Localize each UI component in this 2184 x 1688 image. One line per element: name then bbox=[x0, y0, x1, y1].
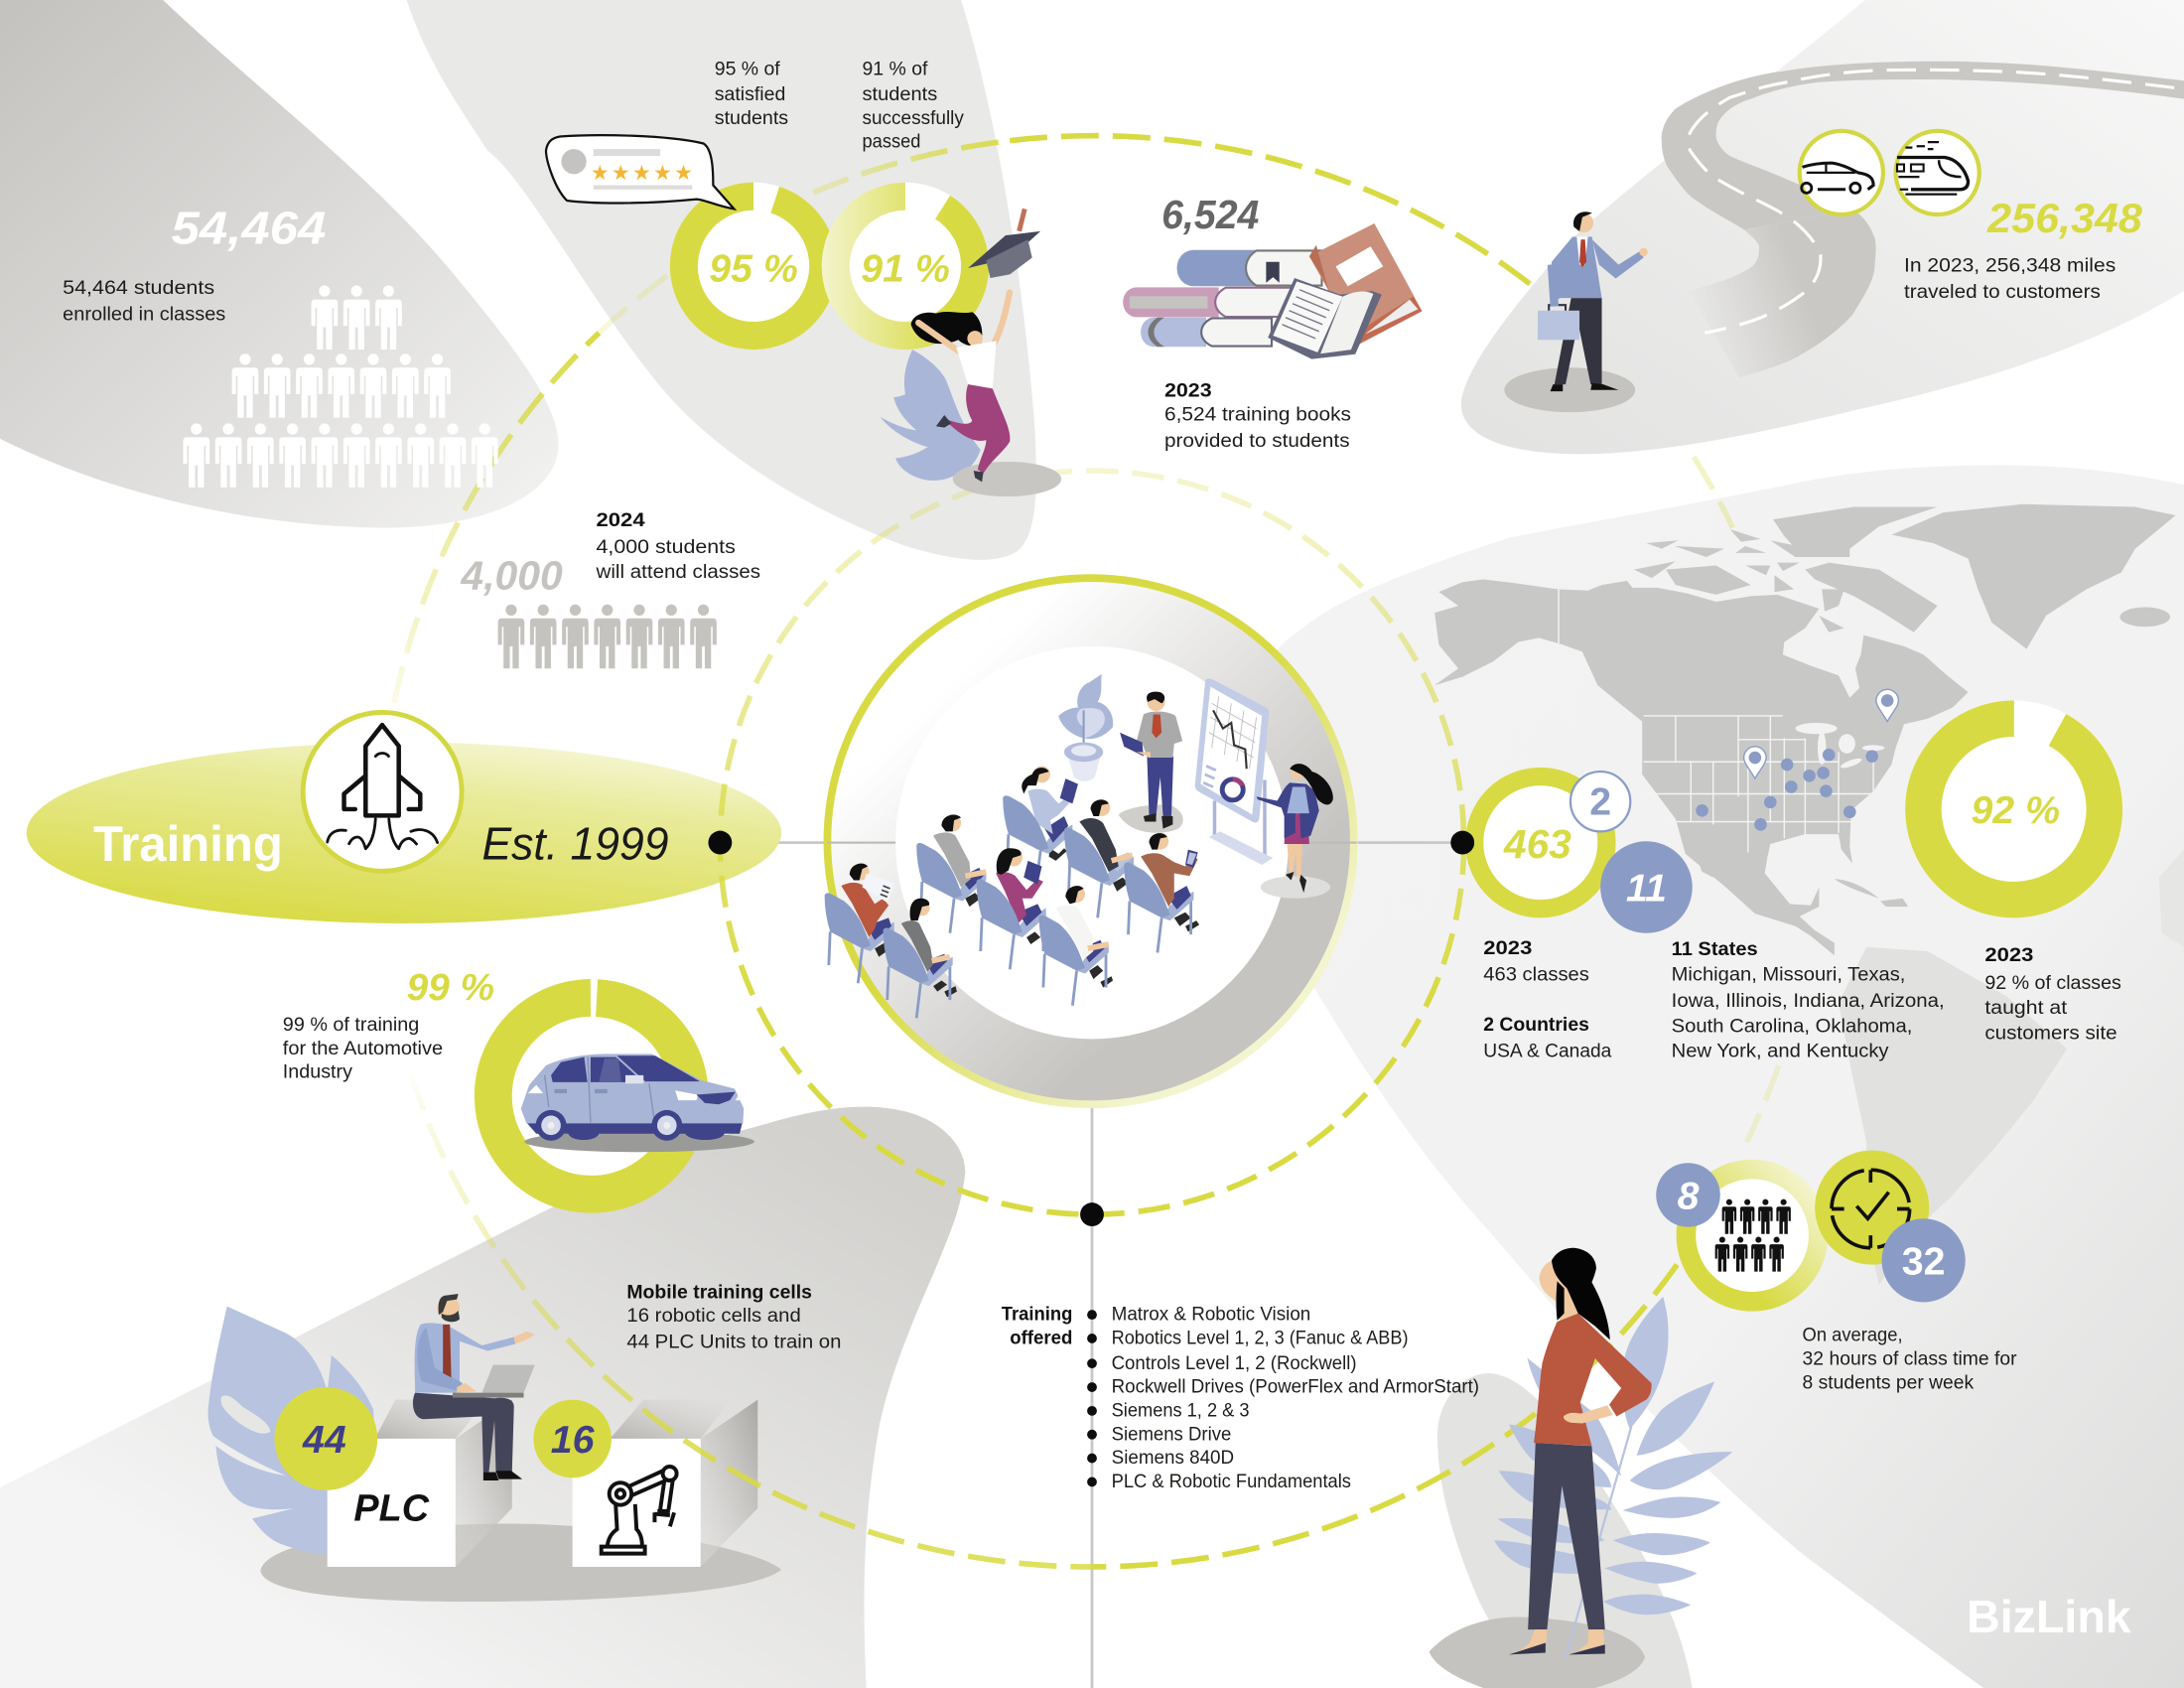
donut: 463 classes: 463 bbox=[1503, 821, 1571, 867]
text: hours of class: 8 students per week bbox=[1803, 1371, 1974, 1393]
text: students enrolled: 54,464 students bbox=[63, 277, 214, 299]
text: classes and countries: USA & Canada bbox=[1483, 1041, 1611, 1062]
text: automotive: 99 % of training bbox=[283, 1014, 419, 1036]
badge: 32 hours: 32 bbox=[1902, 1239, 1945, 1283]
list: training offered: Rockwell Drives (PowerFlex and ArmorStart) bbox=[1112, 1376, 1479, 1398]
text: mobile training cells: Mobile training cells bbox=[626, 1281, 812, 1303]
list: training offered: Controls Level 1, 2 (Rockwell) bbox=[1112, 1352, 1357, 1374]
text: training offered label: offered bbox=[1010, 1328, 1072, 1349]
text: automotive: for the Automotive bbox=[283, 1038, 443, 1059]
list: training offered: Matrox & Robotic Vision bbox=[1112, 1304, 1310, 1326]
student: blue blouse bbox=[1003, 766, 1078, 886]
badge: 44 PLC units bbox=[274, 1387, 377, 1490]
text: classes and countries: 2 Countries bbox=[1483, 1014, 1589, 1036]
stat: 99 %: 99 % bbox=[407, 967, 494, 1009]
panel: central circle bbox=[827, 578, 1354, 1104]
donut: 463 classes bbox=[1474, 776, 1606, 909]
box robot bbox=[573, 1400, 757, 1567]
icon: clock bbox=[1815, 1151, 1929, 1265]
icon: review speech bubble: ★ bbox=[674, 162, 693, 185]
text: students enrolled bbox=[63, 277, 225, 326]
text: training books bbox=[1164, 380, 1351, 452]
donut: 95 %: 95 % bbox=[709, 246, 798, 290]
text: students enrolled: enrolled in classes bbox=[63, 304, 225, 326]
map: USA state lines and lakes bbox=[1559, 589, 1884, 852]
list: training offered: Siemens 840D bbox=[1112, 1447, 1234, 1469]
illustration: jumping graduate bbox=[881, 209, 1061, 496]
text: automotive bbox=[283, 1014, 443, 1083]
background blob: map area bbox=[1227, 465, 2184, 1688]
illustration: businessman bbox=[1504, 211, 1648, 412]
text: students passed: 91 % of bbox=[862, 59, 928, 80]
icon: review speech bubble: ★ bbox=[591, 162, 610, 185]
badge: 2 countries bbox=[1570, 772, 1630, 831]
text: states: Michigan, Missouri, Texas, bbox=[1672, 963, 1905, 985]
floor shadow bbox=[260, 1523, 781, 1602]
text: students passed: students bbox=[862, 83, 937, 105]
text: satisfied students bbox=[715, 59, 788, 129]
text: states: 11 States bbox=[1672, 938, 1758, 960]
student: white shirt bbox=[1039, 886, 1113, 1006]
flip chart bbox=[1195, 678, 1273, 865]
background blob: behind standing woman bbox=[1437, 1373, 1693, 1688]
text: classes and countries: 463 classes bbox=[1483, 963, 1589, 985]
node dots bbox=[708, 831, 1474, 1226]
background blob: bottom left bbox=[0, 1107, 965, 1688]
map: South America bbox=[1839, 947, 2067, 1286]
icon: review speech bubble bbox=[546, 135, 734, 209]
icon: map pin Oklahoma bbox=[1744, 747, 1766, 778]
text: customers site: 92 % of classes bbox=[1984, 972, 2121, 994]
presenting woman bbox=[1257, 764, 1333, 899]
road bbox=[1662, 62, 2184, 377]
icon: car circle bbox=[1800, 131, 1883, 214]
text: 2024 students: 4,000 students bbox=[597, 536, 736, 558]
text: hours of class: 32 hours of class time for bbox=[1803, 1348, 2017, 1370]
illustration: classroom bbox=[825, 674, 1333, 1018]
text: mobile training cells: 44 PLC Units to train on bbox=[626, 1332, 841, 1353]
background blob: top centre bbox=[407, 0, 1036, 560]
list: training offered: Robotics Level 1, 2, 3 (Fanuc & ABB) bbox=[1112, 1328, 1408, 1349]
icon: rocket bbox=[303, 712, 462, 871]
text: miles traveled bbox=[1904, 255, 2116, 303]
map: North America bbox=[1434, 504, 2176, 955]
list: training offered: PLC & Robotic Fundamentals bbox=[1112, 1471, 1351, 1492]
donut: 91 %: 91 % bbox=[861, 246, 950, 290]
stat: 256,348: 256,348 bbox=[1986, 195, 2143, 241]
badge: 44 PLC units: 44 bbox=[302, 1418, 346, 1462]
box PLC bbox=[328, 1400, 512, 1567]
background blob: top left bbox=[0, 0, 559, 528]
text: satisfied students: students bbox=[715, 107, 788, 129]
student: grey sweater bbox=[916, 815, 986, 933]
background blob: top right bbox=[1461, 0, 2184, 454]
text: hours of class: On average, bbox=[1803, 1325, 1903, 1346]
list: training offered: Siemens 1, 2 & 3 bbox=[1112, 1399, 1250, 1421]
illustration: standing woman bbox=[1509, 1248, 1652, 1654]
donut: 99 % bbox=[493, 998, 690, 1195]
text: satisfied students: satisfied bbox=[715, 83, 785, 105]
icon: review speech bubble: ★ bbox=[612, 162, 630, 185]
icon: review speech bubble: ★ bbox=[632, 162, 651, 185]
student: brown sweater bbox=[1124, 833, 1199, 952]
text: satisfied students: 95 % of bbox=[715, 59, 780, 80]
text: miles traveled: In 2023, 256,348 miles bbox=[1904, 255, 2116, 277]
leaf hole bbox=[221, 1395, 270, 1434]
icon: car bbox=[521, 1054, 754, 1152]
text: classes and countries bbox=[1483, 937, 1611, 1062]
icon: robot arm bbox=[602, 1467, 677, 1554]
icon: eight students bbox=[1715, 1199, 1791, 1272]
stat: 6,524: 6,524 bbox=[1161, 192, 1259, 237]
student: red sweater reading bbox=[825, 864, 894, 983]
badge: 8 students bbox=[1656, 1163, 1720, 1227]
text: students passed: passed bbox=[862, 131, 920, 153]
dashed orbit: outer top bbox=[394, 136, 1779, 1567]
text: training books: provided to students bbox=[1164, 430, 1350, 452]
illustration: books bbox=[1123, 223, 1423, 359]
icon: train circle bbox=[1896, 131, 1979, 214]
icon: map pin Canada bbox=[1876, 689, 1898, 722]
donut: 95 % bbox=[670, 183, 837, 350]
list: training offered: Siemens Drive bbox=[1112, 1423, 1231, 1445]
donut: 92 % bbox=[1905, 701, 2122, 917]
icon: review speech bubble: ★ bbox=[653, 162, 672, 185]
text: states: South Carolina, Oklahoma, bbox=[1672, 1015, 1912, 1037]
stat: 4,000: 4,000 bbox=[460, 552, 563, 598]
monstera leaf bbox=[207, 1307, 376, 1554]
badge: 8 students: 8 bbox=[1678, 1174, 1700, 1217]
text: states: New York, and Kentucky bbox=[1672, 1041, 1889, 1062]
floor shadow: standing woman bbox=[1430, 1617, 1645, 1688]
donut: 92 %: 92 % bbox=[1971, 788, 2060, 832]
text: hours of class bbox=[1803, 1325, 2017, 1393]
box PLC: PLC bbox=[353, 1488, 430, 1530]
text: 2024 students: 2024 bbox=[597, 509, 645, 531]
text: students passed: successfully bbox=[862, 107, 964, 129]
text: customers site: taught at bbox=[1984, 997, 2068, 1019]
text: states: Iowa, Illinois, Indiana, Arizona, bbox=[1672, 990, 1945, 1012]
dashed orbit: inner bbox=[720, 471, 1464, 1214]
logo: BizLink: BizLink bbox=[1967, 1591, 2131, 1642]
illustration: plant bbox=[1494, 1297, 1732, 1657]
text: mobile training cells bbox=[626, 1281, 841, 1353]
heading: Training: Training bbox=[93, 815, 283, 872]
text: automotive: Industry bbox=[283, 1061, 352, 1083]
donut: 91 % bbox=[822, 183, 989, 350]
centre line segment over disc bbox=[827, 842, 1357, 844]
student: grey top with bob bbox=[884, 899, 957, 1018]
connector lines bbox=[720, 843, 1462, 1688]
text: 2024 students bbox=[595, 509, 760, 583]
text: customers site: customers site bbox=[1984, 1022, 2117, 1044]
text: students passed bbox=[862, 59, 964, 153]
text: mobile training cells: 16 robotic cells and bbox=[626, 1305, 801, 1327]
text: states bbox=[1672, 938, 1945, 1062]
illustration: mobile training cells bbox=[207, 1075, 1092, 1602]
presenter bbox=[1119, 692, 1183, 833]
donut: students ring bbox=[1686, 1170, 1819, 1302]
badge: 11 states bbox=[1600, 841, 1693, 933]
text: miles traveled: traveled to customers bbox=[1904, 281, 2101, 303]
plant bbox=[1058, 674, 1113, 781]
stat: 54,464: 54,464 bbox=[172, 202, 326, 253]
man with laptop bbox=[413, 1294, 535, 1480]
text: customers site: 2023 bbox=[1984, 944, 2034, 966]
text: training offered label: Training bbox=[1002, 1304, 1072, 1326]
people group: 54,464 students bbox=[184, 286, 498, 488]
student: dark shirt bbox=[1064, 799, 1134, 917]
panel: training banner bbox=[27, 743, 781, 923]
dashed orbit: lower left bbox=[411, 1075, 1092, 1567]
badge: 32 hours bbox=[1882, 1218, 1966, 1302]
badge: 16 robotic cells bbox=[533, 1400, 612, 1477]
text: established: Est. 1999 bbox=[481, 817, 668, 869]
text: classes and countries: 2023 bbox=[1483, 937, 1532, 959]
text: customers site bbox=[1984, 944, 2121, 1044]
text: training books: 6,524 training books bbox=[1164, 404, 1351, 426]
list: training offered bbox=[1087, 1304, 1479, 1492]
text: training offered label bbox=[1002, 1304, 1072, 1349]
people group: 4,000 students bbox=[498, 605, 717, 668]
text: 2024 students: will attend classes bbox=[595, 561, 760, 583]
badge: 16 robotic cells: 16 bbox=[551, 1418, 596, 1462]
badge: 2 countries: 2 bbox=[1589, 780, 1611, 824]
badge: 11 states: 11 bbox=[1626, 867, 1667, 911]
text: training books: 2023 bbox=[1164, 380, 1212, 402]
map: location dots bbox=[1696, 749, 1878, 831]
map: Africa edge bbox=[2159, 850, 2184, 947]
student: magenta blouse bbox=[977, 848, 1046, 969]
